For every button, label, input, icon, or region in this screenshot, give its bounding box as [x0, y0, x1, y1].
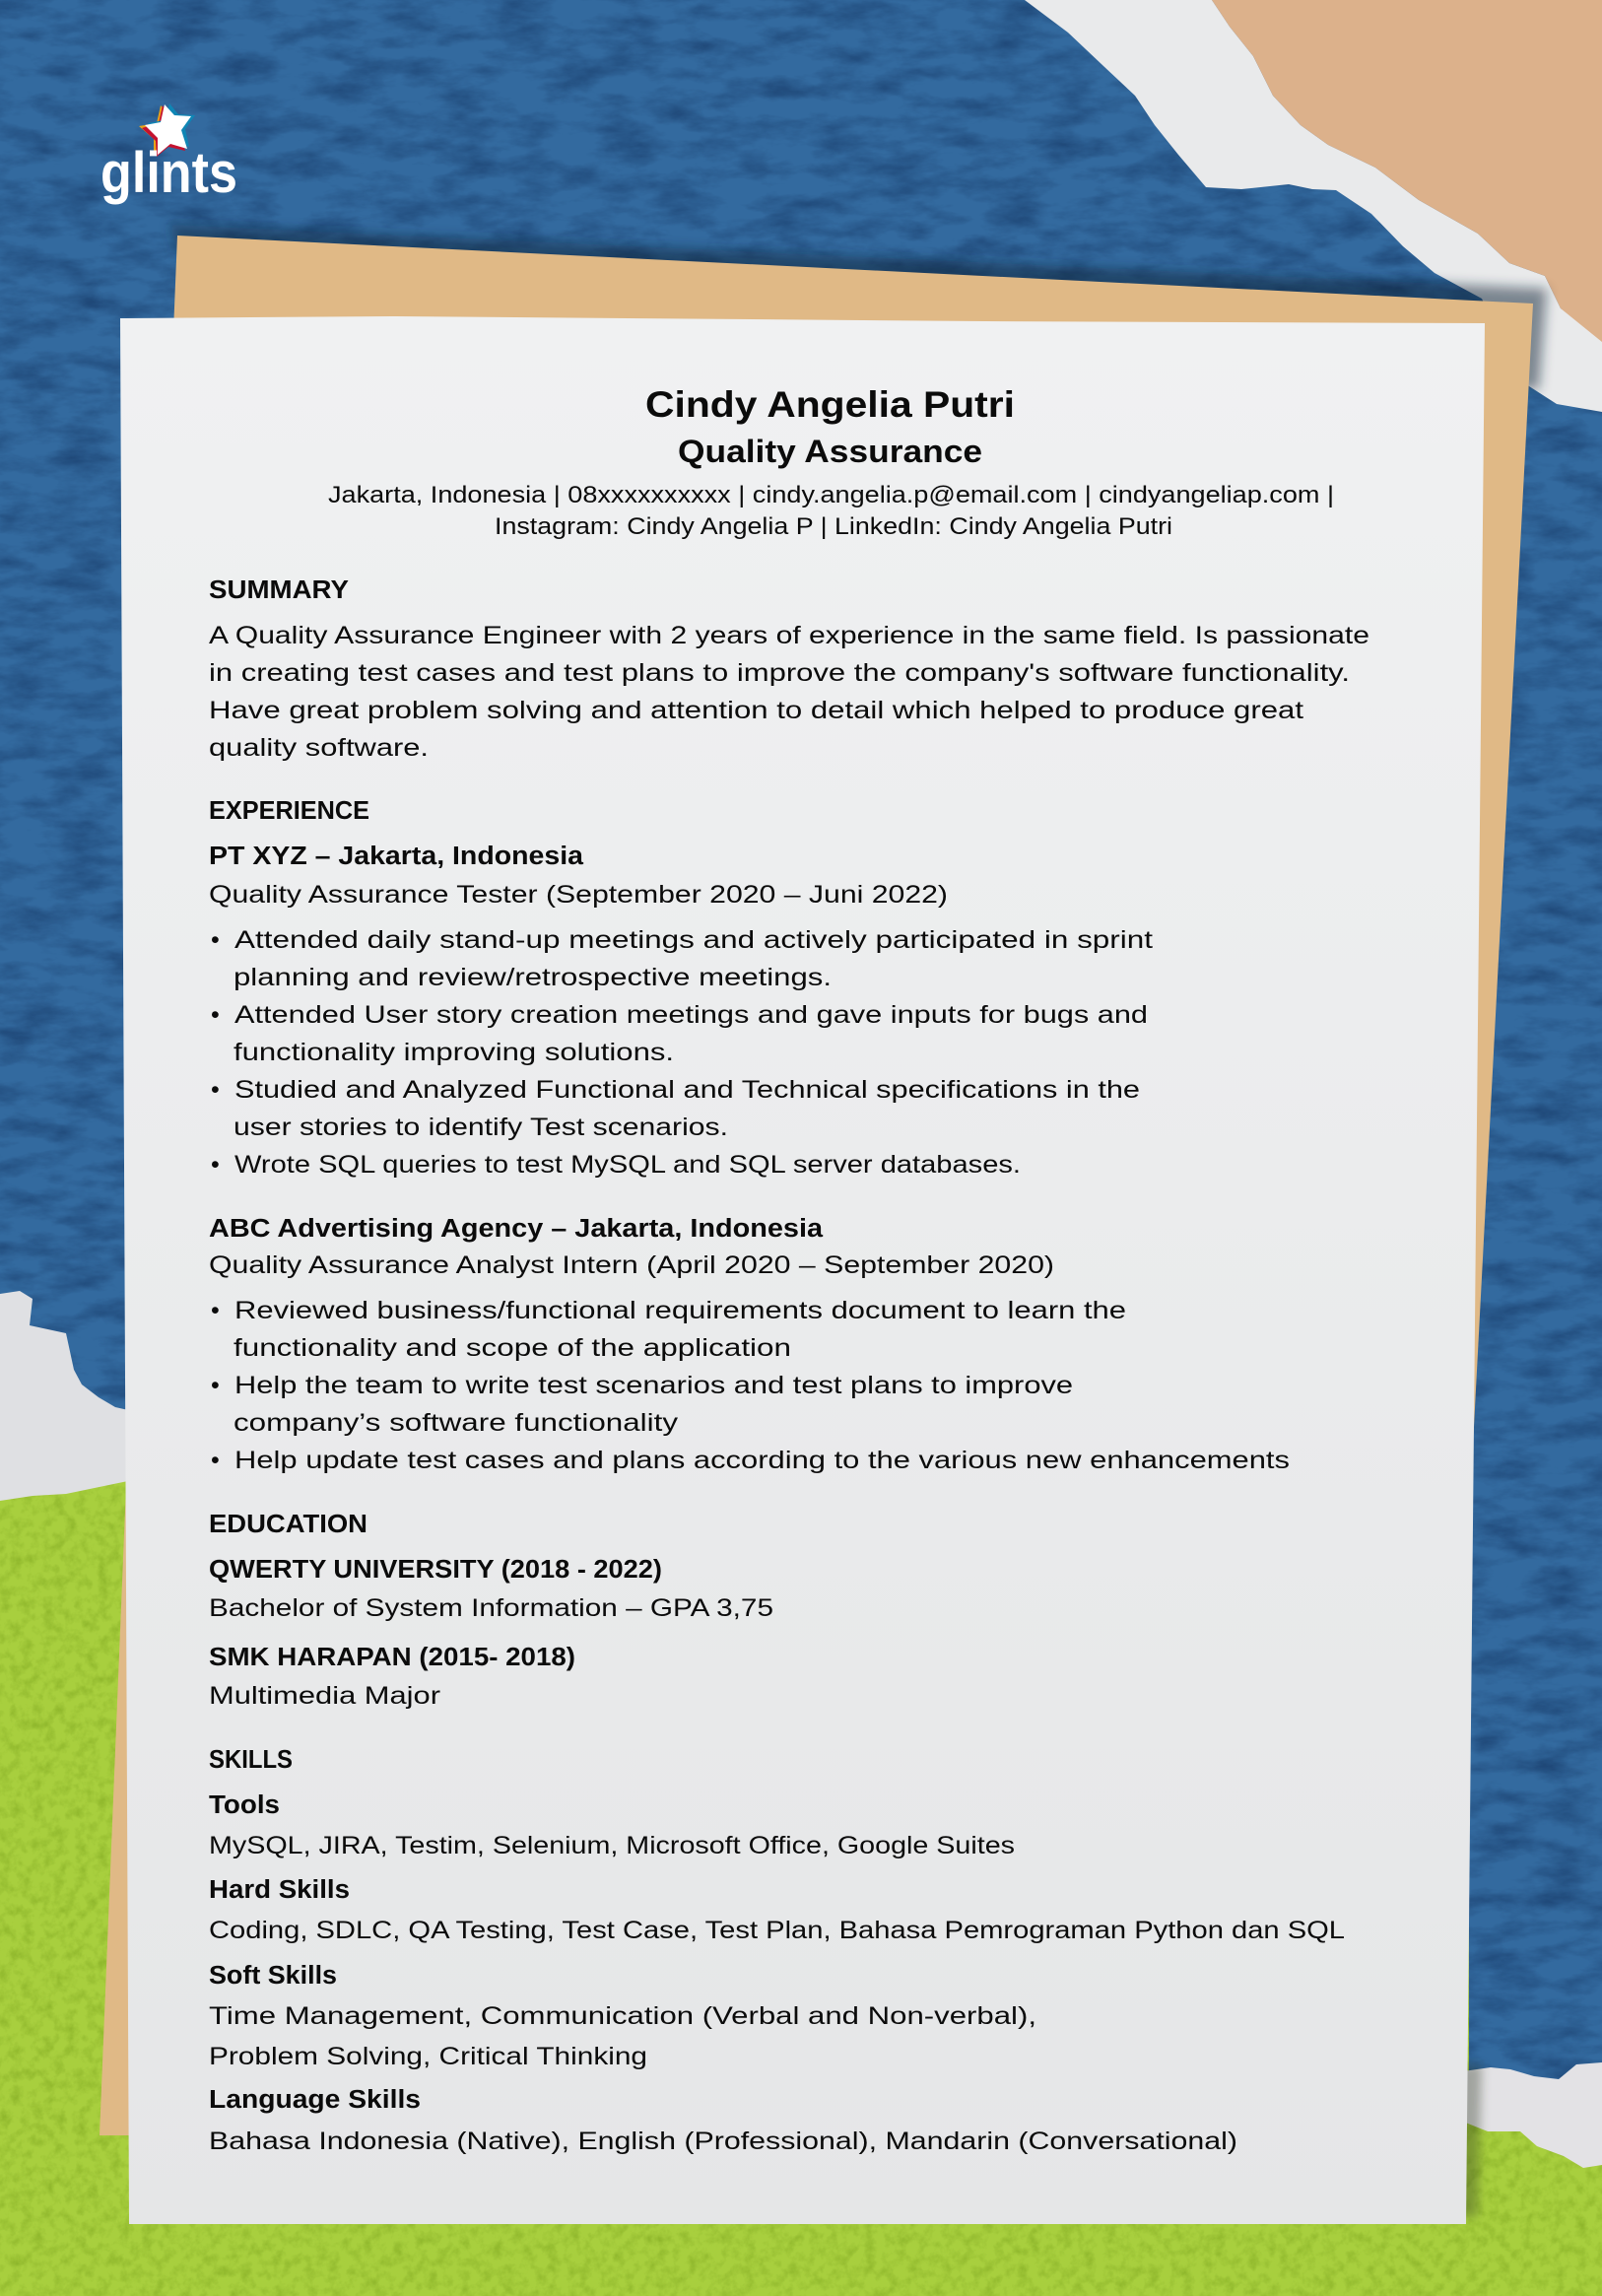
skills: hard skills: Hard Skills — [209, 1876, 350, 1904]
section: summary — [209, 576, 1369, 762]
school: SMK Harapan — [209, 1644, 575, 1710]
tan backing sheet — [100, 236, 1533, 2135]
job: ABC Advertising Agency: Quality Assurance Analyst Intern (April 2020 – September 2020) — [209, 1251, 1054, 1279]
job: PT XYZ: Attended daily stand-up meetings and actively participated in sprint — [234, 926, 1153, 954]
job: PT XYZ: • — [211, 1151, 220, 1179]
heading: skills: SKILLS — [209, 1746, 293, 1774]
skills: language skills — [209, 2086, 1237, 2155]
job: ABC Advertising Agency: • — [211, 1447, 220, 1474]
skills: tools: MySQL, JIRA, Testim, Selenium, Microsoft Office, Google Suites — [209, 1832, 1015, 1859]
job: ABC Advertising Agency: company’s software functionality — [234, 1409, 679, 1437]
skills: tools — [209, 1791, 1015, 1859]
skills: soft skills: Soft Skills — [209, 1962, 337, 1990]
job: PT XYZ: • — [211, 1001, 220, 1029]
background: torn white strip, top right — [1025, 0, 1602, 412]
summary text — [209, 622, 1369, 762]
job: ABC Advertising Agency: Reviewed business/functional requirements document to learn the — [234, 1297, 1126, 1324]
summary text: quality software. — [209, 734, 429, 762]
shadow: behind tan sheet — [169, 225, 1547, 389]
job: ABC Advertising Agency: • — [211, 1372, 220, 1399]
job: ABC Advertising Agency: Help the team to write test scenarios and test plans to improve — [234, 1372, 1073, 1399]
logo wordmark: glints — [100, 141, 237, 205]
job: PT XYZ: • — [211, 1076, 220, 1104]
summary text: in creating test cases and test plans to improve the company's software functionality. — [209, 659, 1350, 687]
school: Qwerty University — [209, 1556, 773, 1622]
background: kraft paper corner, top right — [1212, 0, 1602, 342]
contact details: Jakarta, Indonesia | 08xxxxxxxxxx | cindy.angelia.p@email.com | cindyangeliap.com | — [328, 482, 1334, 508]
skills: language skills: Bahasa Indonesia (Native), English (Professional), Mandarin (Conversational) — [209, 2127, 1237, 2155]
job: PT XYZ: functionality improving solutions. — [234, 1039, 674, 1066]
job: PT XYZ: Quality Assurance Tester (September 2020 – Juni 2022) — [209, 881, 948, 909]
job: PT XYZ: Wrote SQL queries to test MySQL and SQL server databases. — [234, 1151, 1021, 1179]
section: skills — [209, 1746, 1345, 2155]
job: ABC Advertising Agency — [209, 1215, 1290, 1474]
job: PT XYZ: user stories to identify Test scenarios. — [234, 1114, 728, 1141]
summary text: Have great problem solving and attention to detail which helped to produce great — [209, 697, 1303, 724]
summary text: A Quality Assurance Engineer with 2 years of experience in the same field. Is passionate — [209, 622, 1369, 649]
skills: soft skills: Problem Solving, Critical Thinking — [209, 2043, 647, 2070]
name: Cindy Angelia Putri — [645, 384, 1015, 425]
icon: glints star — [139, 103, 195, 157]
white resume sheet — [120, 316, 1485, 2224]
contact details — [328, 482, 1334, 540]
skills: language skills: Language Skills — [209, 2086, 421, 2114]
contact details: Instagram: Cindy Angelia P | LinkedIn: Cindy Angelia Putri — [495, 513, 1172, 540]
background: torn white strip, bottom right — [1463, 2062, 1602, 2168]
job: PT XYZ: • — [211, 926, 220, 954]
job title: Quality Assurance — [678, 434, 982, 469]
heading: education: EDUCATION — [209, 1511, 367, 1538]
section: education — [209, 1511, 773, 1710]
section: experience — [209, 797, 1290, 1474]
job: PT XYZ — [209, 843, 1153, 1179]
school: SMK Harapan: Multimedia Major — [209, 1682, 440, 1710]
school: SMK Harapan: SMK HARAPAN (2015- 2018) — [209, 1644, 575, 1671]
job: ABC Advertising Agency: Help update test cases and plans according to the various new enhancements — [234, 1447, 1290, 1474]
shadow: behind white sheet, bottom right — [1458, 2064, 1482, 2217]
job: ABC Advertising Agency: ABC Advertising Agency – Jakarta, Indonesia — [209, 1215, 824, 1243]
skills: soft skills — [209, 1962, 1036, 2070]
heading: summary: SUMMARY — [209, 576, 349, 604]
skills: soft skills: Time Management, Communication (Verbal and Non-verbal), — [209, 2002, 1036, 2030]
job: ABC Advertising Agency: • — [211, 1297, 220, 1324]
logo: glints — [100, 103, 237, 205]
job: PT XYZ: PT XYZ – Jakarta, Indonesia — [209, 843, 584, 870]
job: PT XYZ: planning and review/retrospective meetings. — [234, 964, 832, 991]
skills: hard skills — [209, 1876, 1345, 1944]
job: PT XYZ: Attended User story creation meetings and gave inputs for bugs and — [234, 1001, 1148, 1029]
heading: experience: EXPERIENCE — [209, 797, 369, 825]
background: torn white strip, bottom left — [0, 1291, 128, 1501]
background: green textured paper — [0, 1478, 1602, 2296]
skills: tools: Tools — [209, 1791, 280, 1819]
job: PT XYZ: Studied and Analyzed Functional and Technical specifications in the — [234, 1076, 1140, 1104]
resume header — [328, 384, 1334, 540]
school: Qwerty University: QWERTY UNIVERSITY (2018 - 2022) — [209, 1556, 662, 1584]
skills: hard skills: Coding, SDLC, QA Testing, Test Case, Test Plan, Bahasa Pemrograman Python dan SQL — [209, 1917, 1345, 1944]
school: Qwerty University: Bachelor of System Information – GPA 3,75 — [209, 1594, 773, 1622]
job: ABC Advertising Agency: functionality and scope of the application — [234, 1334, 791, 1362]
